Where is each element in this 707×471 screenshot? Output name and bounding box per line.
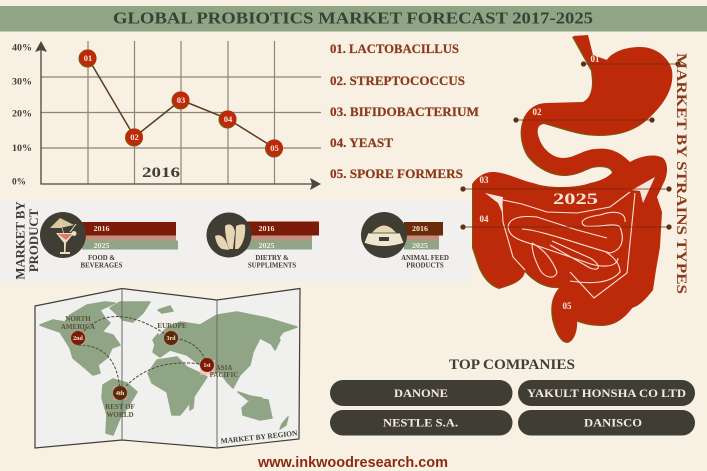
product: dietry and suppliments: 2016	[258, 225, 275, 233]
mesentery gaps	[485, 177, 655, 212]
line chart: market by strain 2016	[12, 41, 321, 190]
data points: 03	[177, 95, 185, 105]
stage labels	[480, 54, 600, 311]
data points: 01	[84, 53, 92, 63]
region labels: ASIA	[216, 364, 232, 372]
region labels: EUROPE	[157, 322, 187, 330]
region labels: REST OF	[105, 403, 135, 411]
intestine outlines	[502, 192, 635, 298]
company: danisco: DANISCO	[584, 418, 642, 430]
map pins: 3rd	[166, 336, 176, 342]
region labels	[61, 315, 238, 419]
product: dietry and suppliments: SUPPLIMENTS	[248, 262, 296, 270]
data points: 02	[130, 132, 139, 142]
title banner	[0, 6, 707, 32]
stage labels: 04	[480, 214, 489, 224]
map pins: 2nd	[73, 336, 83, 342]
company: danone	[330, 380, 512, 406]
icon: food bowl	[364, 226, 404, 246]
company: danisco	[518, 410, 695, 436]
strain list: 05. SPORE FORMERS	[330, 167, 463, 181]
axis labels: 40%	[12, 42, 32, 52]
heading: top companies: TOP COMPANIES	[449, 357, 575, 373]
data points	[78, 50, 283, 158]
product: food and beverages: BEVERAGES	[81, 262, 123, 270]
company: danone: DANONE	[394, 388, 448, 400]
axis labels: 30%	[12, 76, 32, 86]
gut body	[473, 35, 672, 342]
product: food and beverages	[40, 212, 178, 270]
data points: 05	[270, 143, 279, 153]
panel: top companies	[330, 357, 695, 436]
heading: market by strains types: MARKET BY STRAINS TYPES	[673, 53, 689, 294]
digestive system illustration	[461, 35, 680, 343]
strain list: 01. LACTOBACILLUS	[330, 42, 459, 56]
data points: 04	[224, 114, 233, 124]
strain list: 03. BIFIDOBACTERIUM	[330, 105, 479, 119]
strain list	[330, 42, 479, 181]
product: food and beverages: FOOD &	[88, 255, 115, 262]
company: yakult honsha: YAKULT HONSHA CO LTD	[527, 388, 686, 400]
year label 2025: 2025	[553, 191, 598, 208]
stage labels: 02	[532, 107, 542, 117]
icon: leaves	[215, 224, 245, 250]
stage labels: 01	[590, 54, 600, 64]
strain list: 04. YEAST	[330, 136, 394, 150]
map pins: 1st	[203, 363, 211, 369]
axis labels	[12, 42, 32, 186]
panel: world map	[35, 288, 300, 448]
website url: www.inkwoodresearch.com	[257, 455, 448, 471]
product: dietry and suppliments: DIETRY &	[255, 255, 289, 262]
data line	[88, 58, 274, 148]
axis labels: 20%	[12, 108, 32, 118]
map caption: MARKET BY REGION	[220, 428, 298, 445]
map pins: 4th	[116, 391, 125, 397]
product: dietry and suppliments	[206, 212, 319, 270]
heading: market by product: MARKET BY	[14, 201, 28, 280]
region labels: PACIFIC	[210, 371, 238, 379]
stage labels: 03	[480, 175, 489, 185]
product: food and beverages: 2025	[94, 242, 110, 250]
axis labels: 10%	[12, 143, 32, 153]
product: animal feed products: 2016	[412, 225, 429, 233]
product: animal feed products: PRODUCTS	[406, 262, 444, 270]
region labels: NORTH	[65, 315, 91, 323]
product: food and beverages: 2016	[94, 225, 110, 233]
gut shadow	[472, 36, 671, 343]
continents	[40, 302, 297, 435]
map pins	[71, 331, 215, 400]
product: animal feed products: ANIMAL FEED	[401, 255, 449, 262]
panel: market by product	[0, 200, 470, 282]
product: dietry and suppliments: 2025	[258, 242, 275, 250]
map fold frame	[35, 288, 300, 448]
region labels: WORLD	[106, 411, 134, 419]
product: animal feed products: 2025	[412, 242, 429, 250]
dashed routes	[78, 316, 207, 393]
company: nestle	[330, 410, 512, 436]
heading: market by product: PRODUCT	[27, 208, 41, 272]
icon: cocktail	[50, 218, 76, 254]
axis labels: 0%	[12, 176, 26, 186]
strain list: 02. STREPTOCOCCUS	[330, 74, 465, 88]
year label 2016: 2016	[142, 165, 181, 181]
product: animal feed products	[361, 212, 449, 270]
stage labels: 05	[562, 301, 572, 311]
leader lines	[461, 62, 680, 229]
title banner: GLOBAL PROBIOTICS MARKET FORECAST 2017-2025	[113, 8, 593, 28]
company: yakult honsha	[518, 380, 695, 406]
region labels: AMERICA	[61, 323, 95, 331]
company: nestle: NESTLE S.A.	[383, 418, 458, 430]
